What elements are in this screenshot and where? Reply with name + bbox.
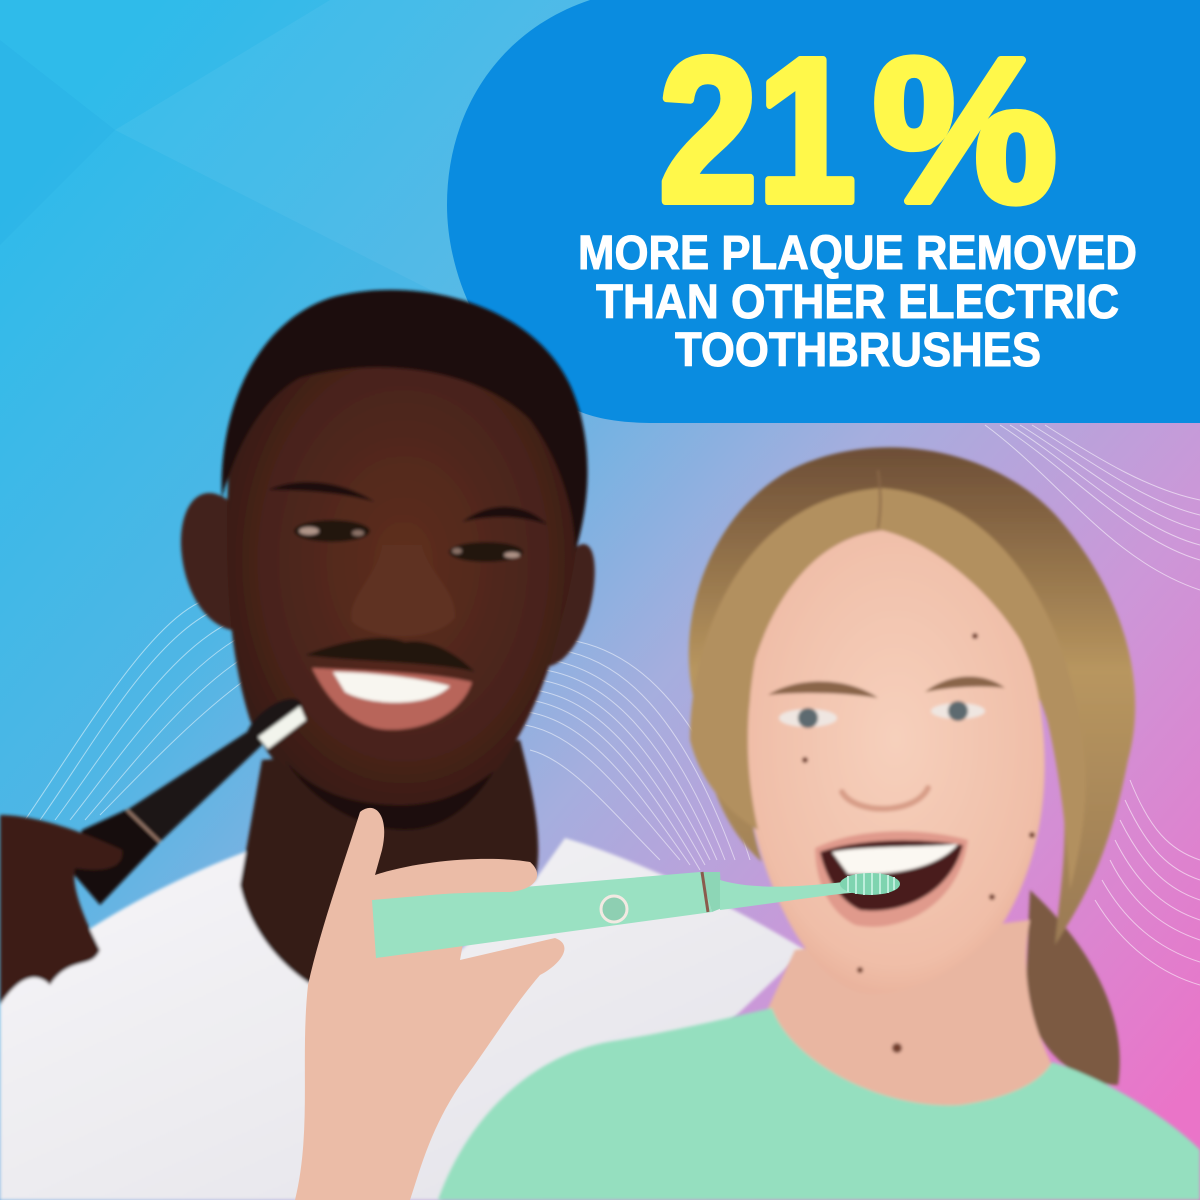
brush bristles [848,873,894,895]
man with black toothbrush [0,290,805,1200]
power button [601,896,627,922]
wave line pattern: left [25,600,245,820]
woman: ponytail [1025,890,1120,1085]
rose gold ring [702,872,708,912]
man: neck [240,740,538,985]
woman: moles [802,633,1035,1053]
mint toothbrush [372,872,900,958]
man: brows [268,482,548,525]
supporting text line 1: MORE PLAQUE REMOVED [578,227,1137,280]
woman: hair back [689,447,1135,945]
man: eyes [294,520,523,562]
woman: face [746,530,1045,993]
callout panel [447,0,1200,423]
woman: teeth [832,844,958,874]
woman: nose [842,788,928,809]
man: smile [312,668,472,730]
woman: brows [768,676,1005,698]
man: black toothbrush [70,690,309,905]
headline statistic [659,16,1057,245]
fingers over toothbrush [372,862,537,900]
woman: hair front [690,488,1086,890]
man: teeth [333,672,450,703]
woman: part line [878,470,880,528]
headline statistic: % [873,16,1057,245]
wave line pattern: right [985,425,1200,985]
man: hair [222,290,588,552]
woman: mouth [820,840,963,911]
woman: neck [765,920,1060,1130]
man: right ear [545,544,595,667]
supporting text line 2: THAN OTHER ELECTRIC [596,276,1119,329]
woman with mint toothbrush [438,447,1200,1200]
woman: eyes [779,701,985,728]
man: left ear [181,493,232,630]
headline statistic: 21 [659,16,856,245]
background light facets [0,0,590,310]
man: white shirt [0,838,805,1200]
man: goatee and jaw stubble [285,760,495,830]
hand holding mint toothbrush [295,808,564,1200]
woman: lips [815,831,968,927]
wave line pattern: centre [525,640,750,870]
man: nose [351,545,455,637]
man: hand [0,815,122,1005]
man: moustache [305,638,475,672]
woman: mint shirt [438,1008,1200,1200]
supporting text line 3: TOOTHBRUSHES [675,324,1041,377]
man: face [227,340,580,830]
